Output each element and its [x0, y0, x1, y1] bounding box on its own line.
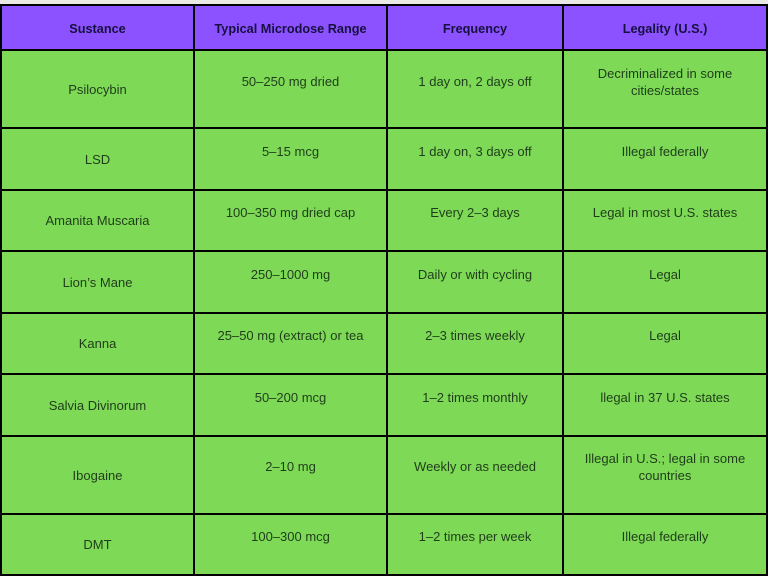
header: Legality (U.S.): Legality (U.S.)	[623, 22, 707, 36]
row: Ibogaine name: Ibogaine	[73, 468, 122, 483]
row: Lion's Mane legality: Legal	[649, 267, 681, 282]
row: Psilocybin frequency: 1 day on, 2 days off	[418, 74, 532, 89]
row: Amanita Muscaria name	[2, 191, 193, 250]
row: Salvia Divinorum range: 50–200 mcg	[255, 390, 326, 405]
row: Kanna frequency: 2–3 times weekly	[425, 328, 525, 343]
row: Psilocybin range: 50–250 mg dried	[242, 74, 339, 89]
row: LSD name: LSD	[85, 152, 110, 167]
row: Amanita Muscaria legality: Legal in most U.S. states	[593, 205, 737, 220]
row: Ibogaine name	[2, 437, 193, 513]
row: Ibogaine legality	[564, 437, 766, 513]
row: LSD legality	[564, 129, 766, 189]
row: Psilocybin frequency	[388, 51, 562, 127]
row: Ibogaine range	[195, 437, 386, 513]
row: Lion's Mane range	[195, 252, 386, 312]
row: LSD frequency: 1 day on, 3 days off	[418, 144, 532, 159]
row: Kanna name	[2, 314, 193, 373]
header: Sustance	[2, 6, 193, 49]
row: Lion's Mane legality	[564, 252, 766, 312]
row: Kanna legality: Legal	[649, 328, 681, 343]
row: Kanna legality	[564, 314, 766, 373]
row: DMT range: 100–300 mcg	[251, 529, 330, 544]
row: Amanita Muscaria legality	[564, 191, 766, 250]
row: Lion's Mane frequency	[388, 252, 562, 312]
row: Kanna frequency	[388, 314, 562, 373]
row: DMT legality	[564, 515, 766, 574]
row: Psilocybin legality	[564, 51, 766, 127]
header: Frequency: Frequency	[443, 22, 507, 36]
row: Lion's Mane name: Lion’s Mane	[63, 275, 132, 290]
header: Frequency	[388, 6, 562, 49]
row: Lion's Mane range: 250–1000 mg	[251, 267, 330, 282]
row: Amanita Muscaria range	[195, 191, 386, 250]
row: Kanna range	[195, 314, 386, 373]
row: Ibogaine range: 2–10 mg	[265, 459, 316, 474]
row: Amanita Muscaria name: Amanita Muscaria	[45, 213, 150, 228]
row: DMT frequency	[388, 515, 562, 574]
row: DMT legality: Illegal federally	[622, 529, 708, 544]
row: Ibogaine legality: Illegal in U.S.; legal in some	[585, 451, 745, 466]
row: LSD frequency	[388, 129, 562, 189]
row: Salvia Divinorum name	[2, 375, 193, 435]
row: Amanita Muscaria range: 100–350 mg dried cap	[226, 205, 355, 220]
row: Ibogaine frequency	[388, 437, 562, 513]
row: Kanna range: 25–50 mg (extract) or tea	[218, 328, 363, 343]
row: DMT name: DMT	[83, 537, 112, 552]
header: Typical Microdose Range: Typical Microdose Range	[214, 22, 367, 36]
row: Salvia Divinorum frequency: 1–2 times monthly	[422, 390, 528, 405]
row: Psilocybin name	[2, 51, 193, 127]
row: Amanita Muscaria frequency: Every 2–3 days	[430, 205, 520, 220]
row: Ibogaine frequency: Weekly or as needed	[414, 459, 536, 474]
top page strip	[0, 0, 768, 4]
row: LSD legality: Illegal federally	[622, 144, 708, 159]
row: Kanna name: Kanna	[79, 336, 116, 351]
row: Psilocybin legality: cities/states	[631, 82, 699, 98]
row: Salvia Divinorum range	[195, 375, 386, 435]
header: Typical Microdose Range	[195, 6, 386, 49]
row: DMT range	[195, 515, 386, 574]
row: Lion's Mane name	[2, 252, 193, 312]
row: Psilocybin name: Psilocybin	[68, 82, 127, 97]
row: LSD name	[2, 129, 193, 189]
row: DMT frequency: 1–2 times per week	[419, 529, 531, 544]
row: Psilocybin legality: Decriminalized in some	[598, 66, 732, 81]
row: LSD range: 5–15 mcg	[262, 144, 319, 159]
row: Salvia Divinorum legality: llegal in 37 U.S. states	[600, 390, 730, 405]
row: Psilocybin range	[195, 51, 386, 127]
row: Ibogaine legality: countries	[639, 468, 691, 482]
row: Lion's Mane frequency: Daily or with cycling	[418, 267, 532, 282]
row: Salvia Divinorum legality	[564, 375, 766, 435]
row: DMT name	[2, 515, 193, 574]
header: Legality (U.S.)	[564, 6, 766, 49]
header: Sustance: Sustance	[69, 22, 126, 36]
row: Salvia Divinorum name: Salvia Divinorum	[49, 398, 146, 413]
row: LSD range	[195, 129, 386, 189]
row: Amanita Muscaria frequency	[388, 191, 562, 250]
row: Salvia Divinorum frequency	[388, 375, 562, 435]
